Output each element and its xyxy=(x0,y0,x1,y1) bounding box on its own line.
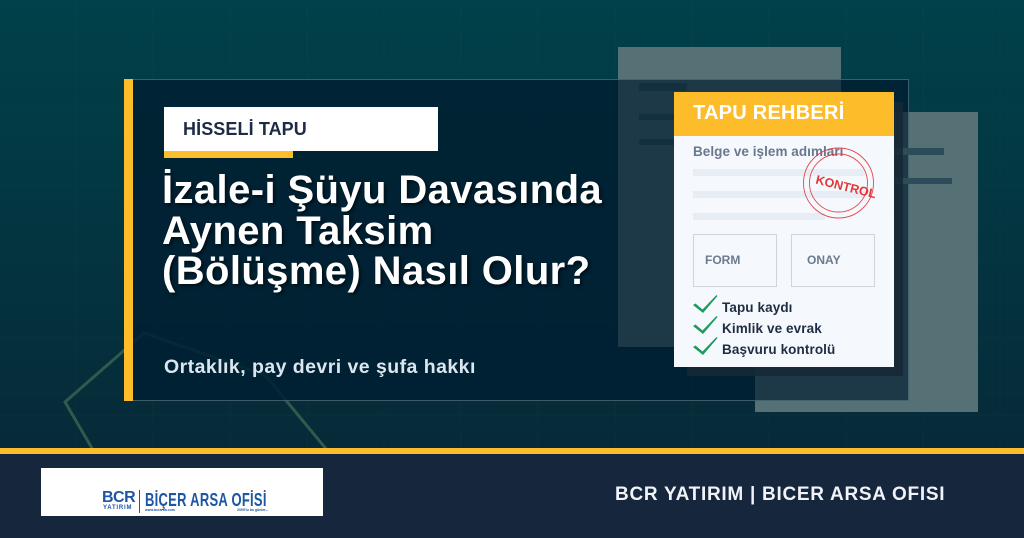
item: başvuru kontrolü: Başvuru kontrolü xyxy=(722,342,835,357)
main title: İzale-i Şüyu Davasında xyxy=(162,168,602,212)
footer text: BCR YATIRIM | BICER ARSA OFISI xyxy=(615,484,945,505)
subtitle: Ortaklık, pay devri ve şufa hakkı xyxy=(164,356,476,378)
back paper right xyxy=(755,112,978,412)
card: tapu rehberi xyxy=(674,92,894,367)
paper tint inside panel, left xyxy=(618,80,841,347)
paper tint inside panel, right xyxy=(755,112,908,400)
main title: (Bölüşme) Nasıl Olur? xyxy=(162,249,590,293)
logo name: BİÇER ARSA OFİSİ xyxy=(145,490,267,510)
logo xyxy=(41,468,323,516)
stamp: kontrol: KONTROL xyxy=(814,173,878,201)
card subtitle: Belge ve işlem adımları xyxy=(693,144,843,159)
footer accent line xyxy=(0,448,1024,454)
category label xyxy=(164,107,438,151)
label underline xyxy=(164,151,293,158)
logo bcr: BCR xyxy=(102,489,135,506)
main panel xyxy=(124,79,909,401)
form box xyxy=(693,234,777,287)
approval box: ONAY xyxy=(807,253,841,267)
card shadow xyxy=(687,102,903,376)
panel accent bar xyxy=(124,79,133,401)
logo tagline: 2009'lu bu günler... xyxy=(237,508,268,512)
card header xyxy=(674,92,894,136)
logo yatirim: YATIRIM xyxy=(103,505,132,511)
checklist xyxy=(693,295,835,357)
form box: FORM xyxy=(705,253,740,267)
placeholder lines xyxy=(693,169,865,220)
approval box xyxy=(791,234,875,287)
stamp: kontrol xyxy=(803,148,878,218)
logo web address: www.bcrarsa.com xyxy=(145,508,175,512)
item: kimlik ve evrak: Kimlik ve evrak xyxy=(722,321,822,336)
main title xyxy=(162,168,604,296)
category label: HİSSELİ TAPU xyxy=(183,119,307,139)
footer band xyxy=(0,448,1024,538)
icon: checkmarks xyxy=(693,295,718,355)
back paper left xyxy=(618,47,841,347)
card title: TAPU REHBERİ xyxy=(693,102,845,124)
item: tapu kaydı: Tapu kaydı xyxy=(722,300,793,315)
main title: Aynen Taksim xyxy=(162,208,434,252)
logo divider xyxy=(139,490,140,513)
